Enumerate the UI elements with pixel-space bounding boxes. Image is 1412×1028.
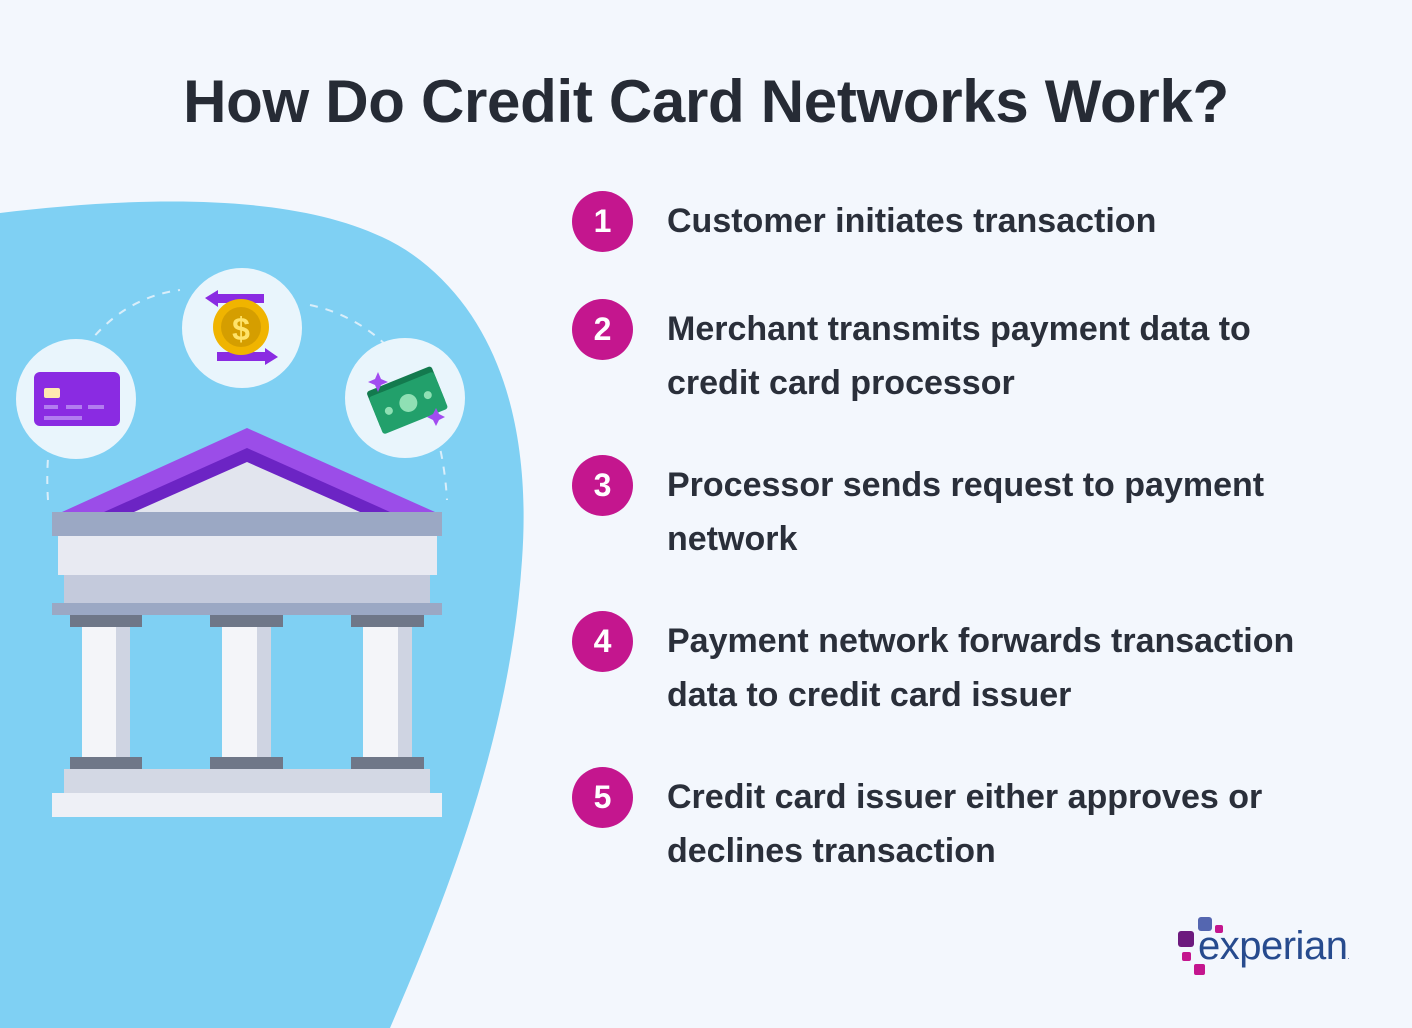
- icon: coin exchange: $: [232, 311, 250, 347]
- step 2: [572, 299, 1251, 402]
- text: declines transaction: [667, 832, 996, 870]
- text: 1: [594, 203, 611, 239]
- text: Processor sends request to payment: [667, 466, 1264, 504]
- logo: experian: experian.: [1198, 924, 1349, 968]
- text: data to credit card issuer: [667, 676, 1071, 714]
- icon: coin exchange: [182, 268, 302, 388]
- text: 5: [594, 779, 611, 815]
- text: 3: [594, 467, 611, 503]
- blue blob: [0, 201, 524, 1028]
- text: Merchant transmits payment data to: [667, 310, 1251, 348]
- text: 2: [594, 311, 611, 347]
- text: network: [667, 520, 797, 558]
- step 4: [572, 611, 1294, 714]
- step 5: [572, 767, 1262, 870]
- text: 4: [594, 623, 611, 659]
- text: credit card processor: [667, 364, 1015, 402]
- icon: bank building: [52, 428, 442, 817]
- title: How Do Credit Card Networks Work?: [183, 68, 1229, 135]
- step 3: [572, 455, 1264, 558]
- text: Credit card issuer either approves or: [667, 778, 1262, 816]
- text: Payment network forwards transaction: [667, 622, 1294, 660]
- step 1: [572, 191, 1156, 252]
- text: Customer initiates transaction: [667, 202, 1156, 240]
- icon: credit card: [16, 339, 136, 459]
- logo: experian: [1178, 917, 1349, 975]
- icon: money: [345, 338, 465, 458]
